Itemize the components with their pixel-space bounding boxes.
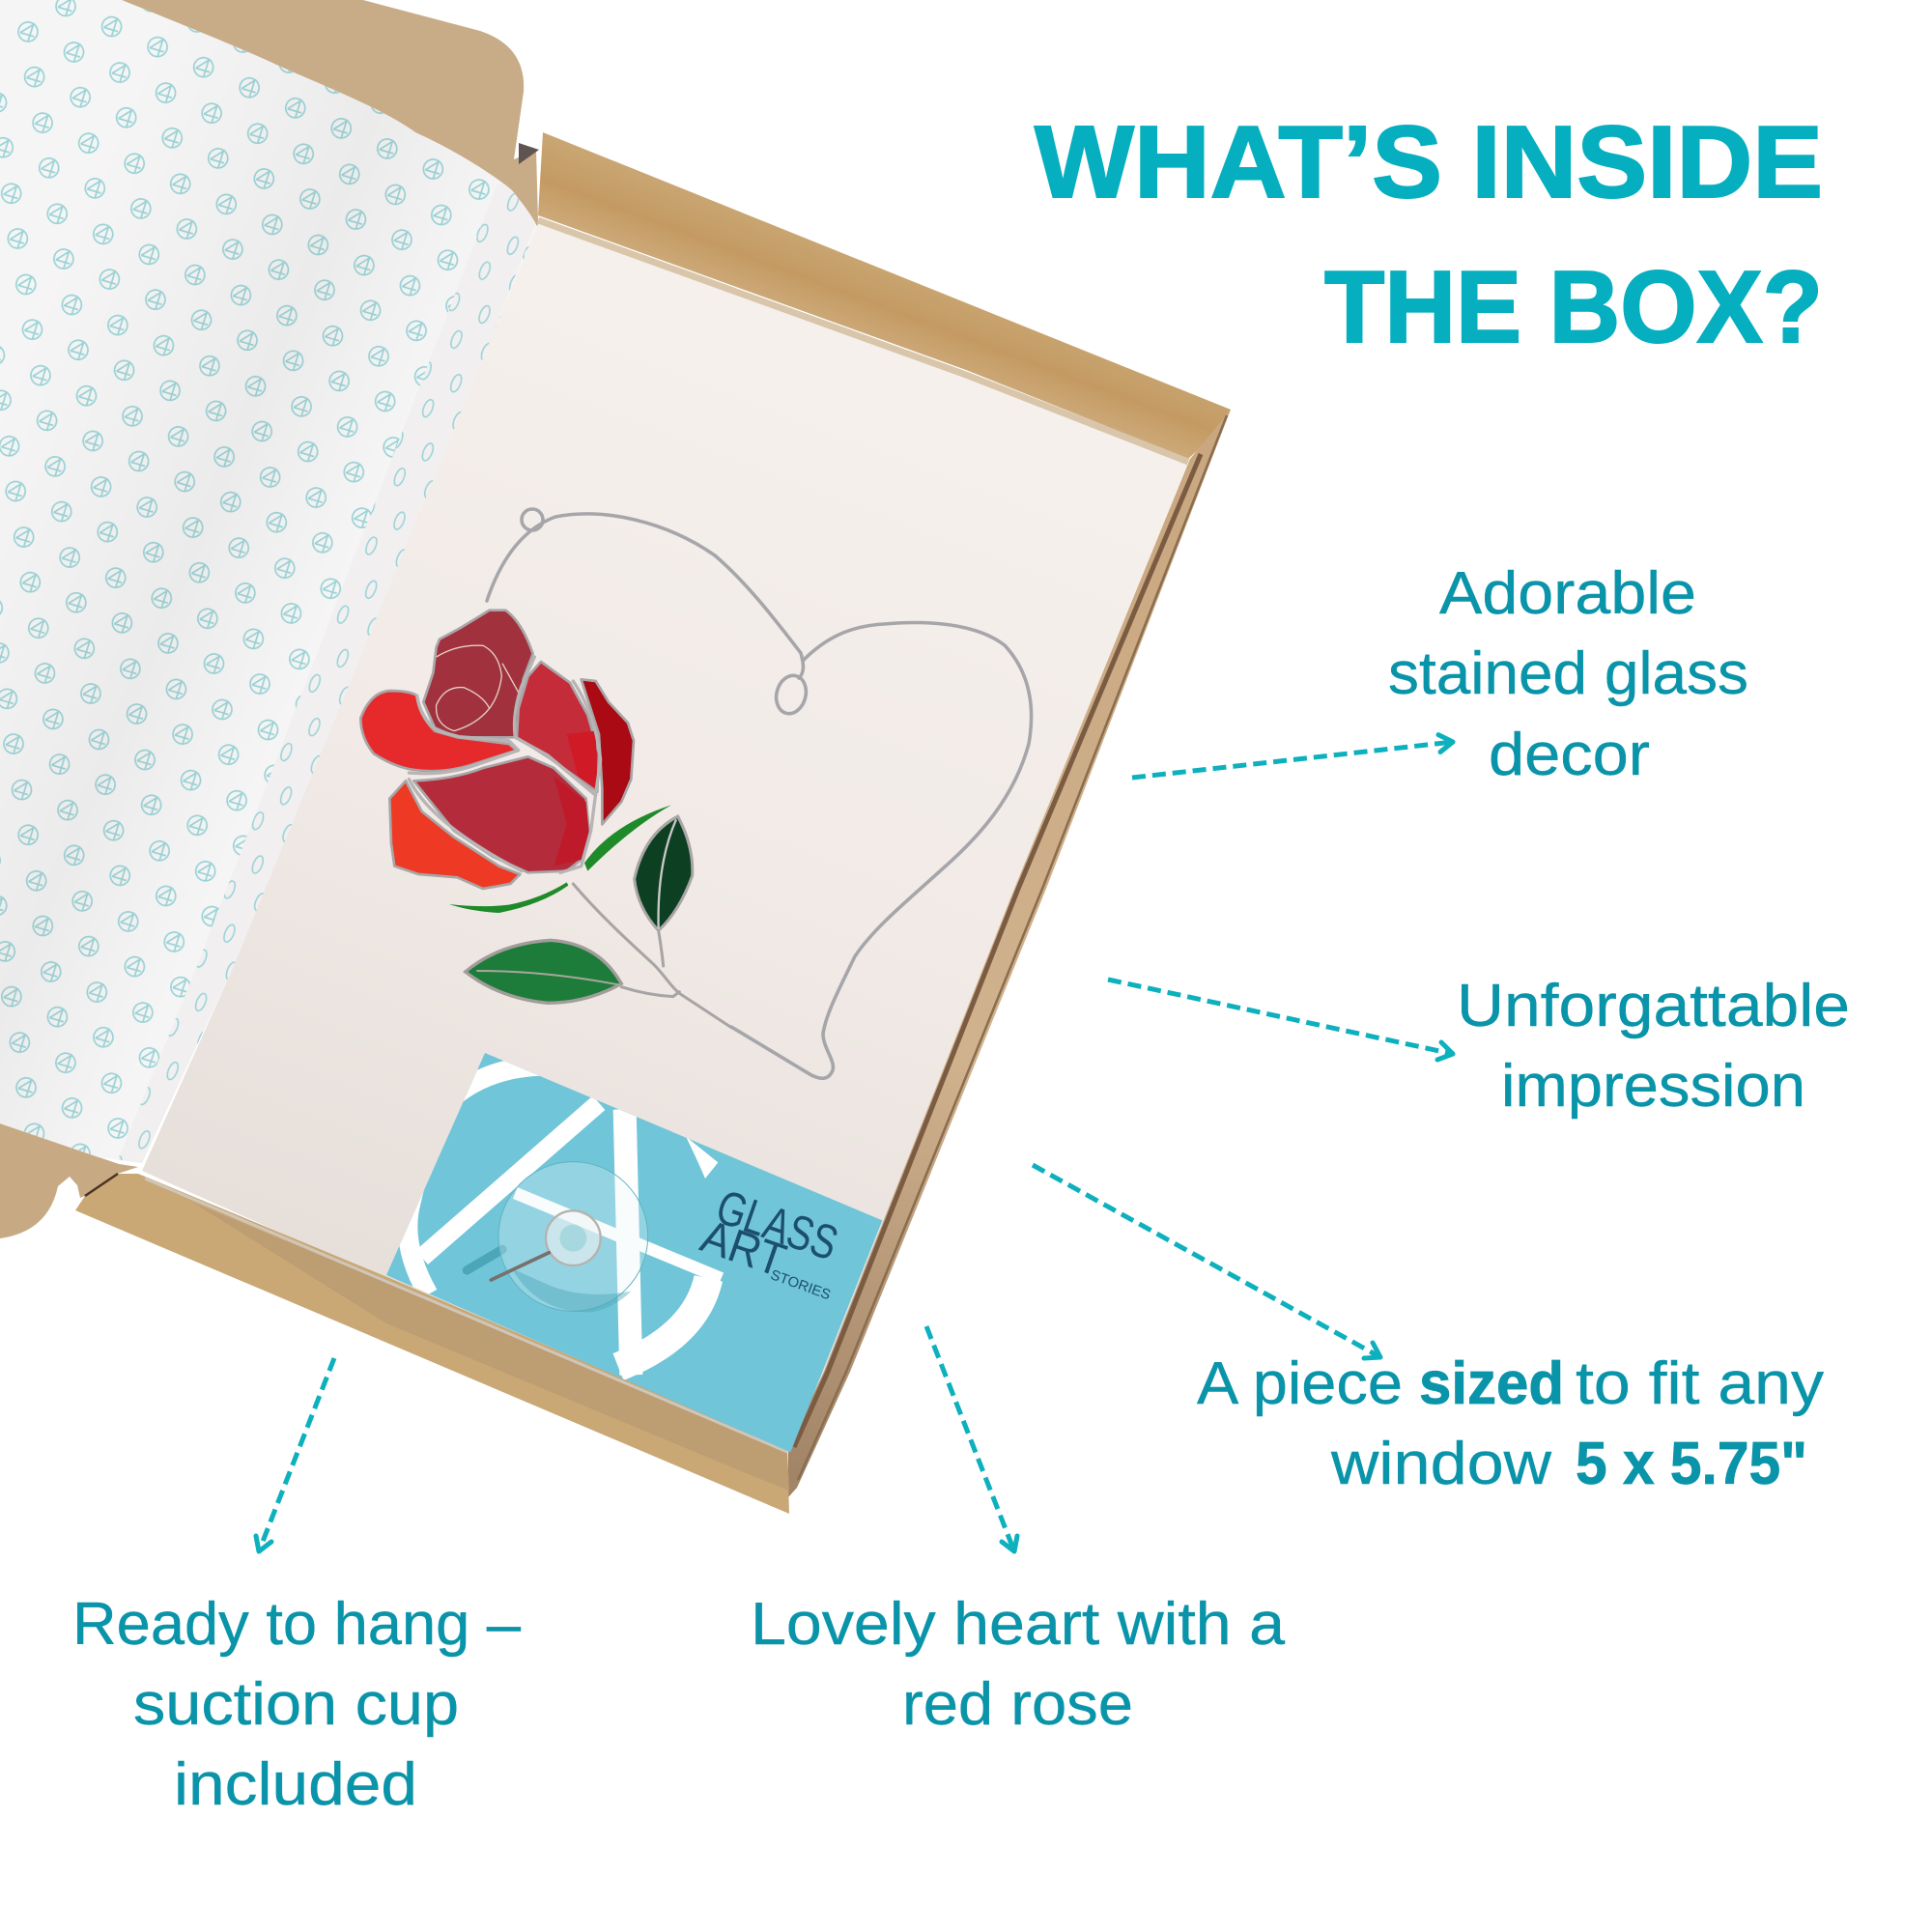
- callout: ready to hang: Ready to hang –: [72, 1591, 522, 1658]
- flap notch shadow: [519, 143, 539, 164]
- foam insert: [142, 224, 1190, 1447]
- box bottom wall: [75, 1174, 789, 1514]
- callout: size: sized: [1419, 1350, 1564, 1417]
- arrow: to stained glass decor: [1132, 735, 1453, 778]
- arrow: to suction cup: [256, 1358, 334, 1551]
- arrow: to size: [1033, 1165, 1380, 1358]
- callout: stained glass decor: stained glass: [1388, 640, 1748, 707]
- heart wire: [487, 509, 1032, 1078]
- card logo text: ART: [695, 1210, 792, 1287]
- callout: stained glass decor: Adorable: [1439, 560, 1696, 627]
- callout: unforgettable impression: [1457, 973, 1850, 1120]
- rose lead lines: [409, 657, 601, 872]
- callout: size: window: [1330, 1431, 1551, 1497]
- callout: size: to fit any: [1576, 1350, 1824, 1417]
- box flap: top: [116, 0, 539, 232]
- callout: unforgettable impression: impression: [1501, 1053, 1805, 1120]
- callout: lovely heart: [751, 1591, 1286, 1738]
- callout: size: [1197, 1350, 1824, 1497]
- arrow: to heart with rose: [926, 1326, 1017, 1551]
- callout: stained glass decor: [1388, 560, 1748, 788]
- callout: size: 5 x 5.75": [1576, 1431, 1807, 1497]
- box right wall: [788, 410, 1231, 1497]
- callout: lovely heart: red rose: [902, 1671, 1133, 1738]
- rose petals: [360, 611, 634, 889]
- tissue paper with logo pattern: [0, 0, 537, 1163]
- box flap: bottom left: [0, 1123, 138, 1238]
- card logo text: STORIES: [768, 1267, 833, 1303]
- white logo monogram: [408, 1065, 722, 1375]
- callout: stained glass decor: decor: [1489, 722, 1650, 788]
- thin green blades: [449, 805, 671, 913]
- callout: unforgettable impression: Unforgattable: [1457, 973, 1850, 1039]
- title: [1035, 105, 1823, 364]
- callout: ready to hang: suction cup: [133, 1671, 459, 1738]
- stem and branches: [573, 884, 731, 1027]
- title: THE BOX?: [1324, 250, 1823, 364]
- business card: [386, 1053, 882, 1452]
- card logo text: [695, 1179, 844, 1303]
- callout: lovely heart: Lovely heart with a: [751, 1591, 1286, 1658]
- stained glass rose: [360, 611, 731, 1027]
- green leaf: [466, 940, 621, 1003]
- dark green leaf: [635, 816, 693, 930]
- title: WHAT’S INSIDE: [1035, 105, 1823, 219]
- callout: ready to hang: [72, 1591, 522, 1818]
- callout: size: A piece: [1197, 1350, 1403, 1417]
- card logo text: GLASS: [710, 1179, 844, 1271]
- callout: ready to hang: included: [174, 1751, 417, 1818]
- box top wall: [538, 132, 1231, 462]
- suction cup: [467, 1162, 648, 1312]
- arrow: to impression: [1108, 980, 1453, 1060]
- rose inner wire spiral: [437, 645, 519, 731]
